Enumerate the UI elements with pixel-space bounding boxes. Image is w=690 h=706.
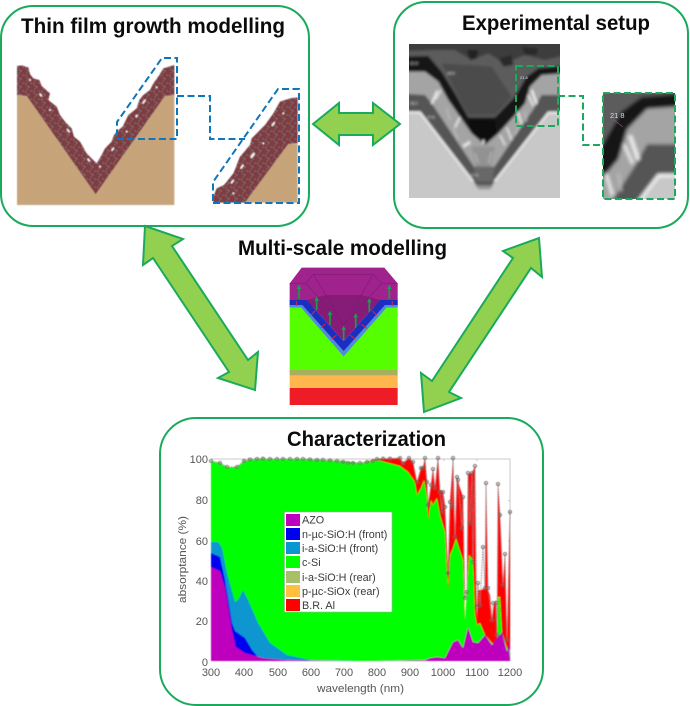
- TEM micrograph: [409, 44, 560, 198]
- multi-scale device stack: [290, 268, 398, 405]
- absorptance chart: [177, 454, 522, 695]
- x axis tick labels: 1200: [498, 667, 522, 679]
- arrow: left diagonal double: [143, 226, 258, 390]
- micrograph thickness label: 21.8: [520, 75, 529, 80]
- legend: c-Si: [302, 557, 321, 569]
- legend: i-a-SiO:H (front): [302, 543, 378, 555]
- panel: experimental setup: [393, 1, 689, 229]
- x axis tick labels: 800: [368, 667, 386, 679]
- inset: enlarged film: [213, 97, 298, 203]
- simulated film on V-groove: [17, 65, 174, 205]
- x axis title: wavelength (nm): [316, 683, 404, 695]
- panel: characterization: [160, 418, 543, 705]
- arrow: right diagonal double: [421, 238, 542, 412]
- legend: n-µc-SiO:H (front): [302, 529, 387, 541]
- legend: [284, 512, 392, 612]
- stacked absorptance areas: [211, 458, 510, 661]
- y axis tick labels: 100: [190, 454, 208, 466]
- inset label: [610, 111, 625, 127]
- plot frame: [211, 459, 510, 661]
- y axis tick labels: 40: [196, 576, 208, 588]
- y axis tick labels: [190, 454, 208, 669]
- x axis tick labels: 1000: [431, 667, 455, 679]
- y axis tick labels: 80: [196, 495, 208, 507]
- x axis tick labels: 1100: [465, 667, 489, 679]
- inset label: 21 8: [610, 111, 625, 120]
- legend: B.R. Al: [302, 600, 335, 612]
- x axis tick labels: 900: [401, 667, 419, 679]
- heading: characterization: Characterization: [287, 428, 446, 451]
- panel: thin film growth modelling: [1, 6, 309, 226]
- y axis tick labels: 0: [202, 657, 208, 669]
- heading: experimental setup: Experimental setup: [462, 12, 650, 35]
- x axis tick labels: 700: [335, 667, 353, 679]
- arrow: horizontal double: [313, 103, 400, 145]
- y axis title: absorptance (%): [177, 516, 189, 603]
- x axis tick labels: 400: [235, 667, 253, 679]
- x axis tick labels: [202, 667, 522, 679]
- heading: multi-scale modelling: Multi-scale modelling: [238, 237, 447, 260]
- legend: p-µc-SiOx (rear): [302, 586, 380, 598]
- y axis tick labels: 60: [196, 536, 208, 548]
- heading: thin film growth modelling: Thin film growth modelling: [21, 15, 285, 38]
- x axis tick labels: 500: [269, 667, 287, 679]
- y axis tick labels: 20: [196, 616, 208, 628]
- dashed selection and connector: [516, 66, 675, 199]
- dashed selection and connector: [117, 58, 299, 203]
- legend: i-a-SiO:H (rear): [302, 572, 376, 584]
- x axis tick labels: 600: [302, 667, 320, 679]
- TEM inset: [603, 93, 675, 199]
- legend: AZO: [302, 514, 324, 526]
- x axis tick labels: 300: [202, 667, 220, 679]
